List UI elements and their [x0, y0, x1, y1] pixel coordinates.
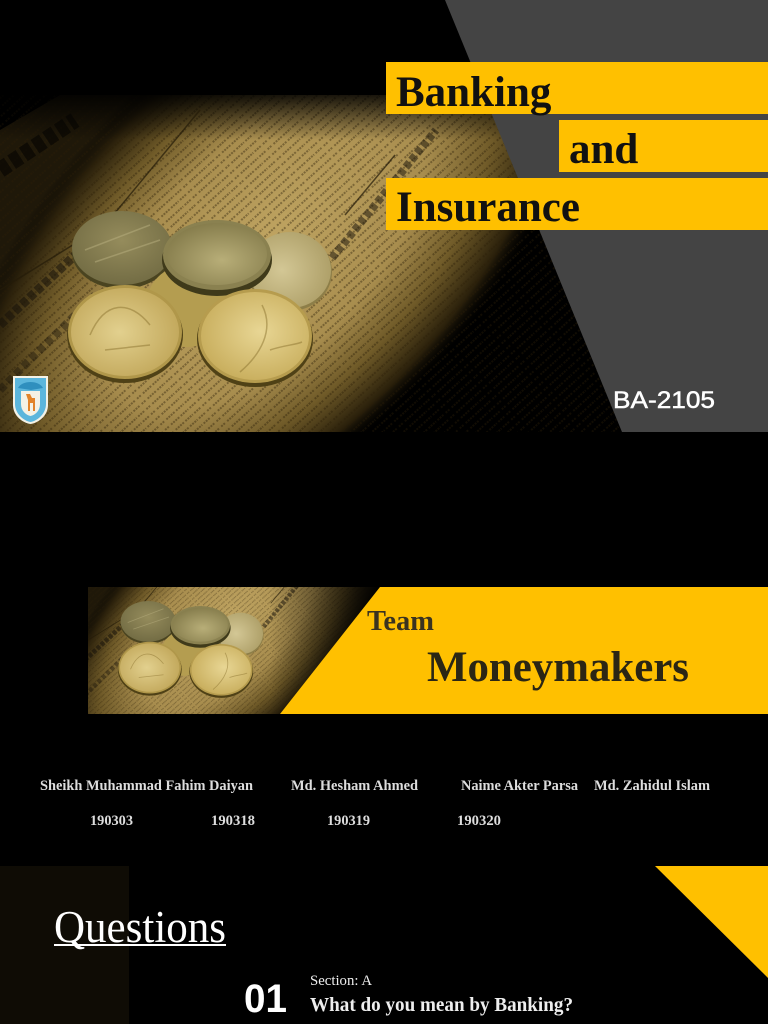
team label: Team: [367, 606, 434, 637]
student ids: 190319: [327, 813, 370, 829]
team member names: Sheikh Muhammad Fahim Daiyan: [40, 778, 254, 794]
panel: team banner yellow shape: [280, 587, 768, 714]
team member names: Naime Akter Parsa: [461, 778, 578, 794]
panel: dark gray diagonal panel: [445, 0, 768, 432]
student ids: 190303: [90, 813, 133, 829]
title bar: Banking: [386, 62, 768, 116]
section label: Section: A: [310, 973, 372, 989]
team name: Moneymakers: [427, 644, 689, 691]
title bar: Insurance: Insurance: [396, 184, 580, 231]
panel: left dark block: [0, 866, 129, 1024]
panel: top cover photo of coins on newspaper: [0, 95, 620, 432]
student ids: [90, 813, 501, 829]
course code: BA-2105: [613, 387, 715, 414]
icon: yellow corner triangle: [655, 866, 768, 978]
icon: university logo shield: [13, 376, 48, 424]
title bar: and: [559, 120, 768, 173]
student ids: 190320: [457, 813, 501, 829]
question text: What do you mean by Banking?: [310, 994, 573, 1016]
title bar: and: and: [569, 126, 638, 173]
title bar: Banking: Banking: [396, 69, 552, 116]
panel: team banner photo: [88, 587, 371, 714]
heading: Questions: Questions: [54, 902, 226, 952]
team member names: [40, 778, 710, 794]
question number: 01: [244, 977, 287, 1021]
title bar: Insurance: [386, 178, 768, 231]
team member names: Md. Hesham Ahmed: [291, 778, 419, 794]
student ids: 190318: [211, 813, 255, 829]
team member names: Md. Zahidul Islam: [594, 778, 710, 794]
